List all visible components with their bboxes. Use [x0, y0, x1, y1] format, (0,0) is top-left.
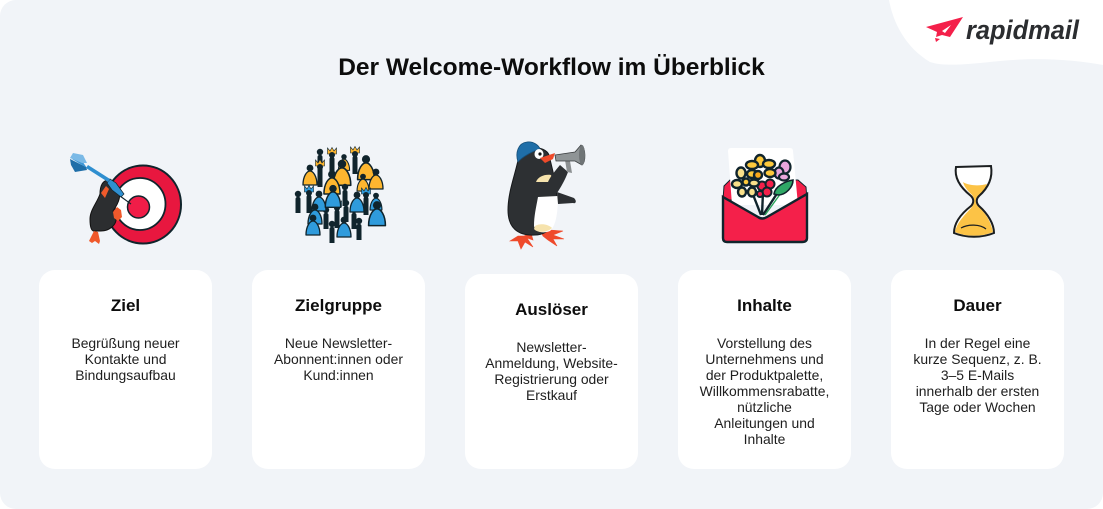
text: Inhalte: der Produktpalette, — [706, 367, 823, 383]
text: Inhalte: Willkommensrabatte, — [700, 383, 829, 399]
icon: audience crowd — [295, 146, 385, 243]
text: Inhalte: Unternehmens und — [705, 351, 824, 367]
text: Auslöser: Erstkauf — [526, 387, 577, 403]
text: Zielgruppe: Abonnent:innen oder — [274, 351, 403, 367]
icon: envelope with flowers — [723, 148, 807, 242]
text: Ziel: Begrüßung neuer — [71, 335, 180, 351]
title: Der Welcome-Workflow im Überblick — [338, 54, 765, 81]
panel: Zielgruppe — [252, 270, 425, 469]
text: Ziel: Bindungsaufbau — [75, 367, 176, 383]
heading: Zielgruppe: Zielgruppe — [295, 296, 382, 315]
text: Zielgruppe: Neue Newsletter- — [285, 335, 392, 351]
text: Dauer: 3–5 E-Mails — [941, 367, 1014, 383]
text: Zielgruppe — [274, 335, 403, 383]
icon: dart in target with penguin — [70, 153, 181, 244]
text: Dauer — [913, 335, 1042, 415]
text: Dauer: kurze Sequenz, z. B. — [913, 351, 1042, 367]
text: Ziel: Kontakte und — [85, 351, 166, 367]
text: Inhalte: nützliche — [737, 399, 792, 415]
text: Dauer: innerhalb der ersten — [916, 383, 1039, 399]
text: Inhalte: Vorstellung des — [717, 335, 812, 351]
text: Dauer: Tage oder Wochen — [919, 399, 1036, 415]
text: Auslöser: Registrierung oder — [494, 371, 609, 387]
heading: Auslöser: Auslöser — [515, 300, 588, 319]
text: Inhalte: Anleitungen und — [714, 415, 815, 431]
heading: Inhalte: Inhalte — [737, 296, 792, 315]
heading: Dauer: Dauer — [953, 296, 1002, 315]
text: Auslöser — [485, 339, 618, 403]
panel: Auslöser — [465, 274, 638, 469]
panel: Inhalte — [678, 270, 851, 469]
panel: Ziel — [39, 270, 212, 469]
text: Inhalte: Inhalte — [744, 431, 785, 447]
heading: Ziel: Ziel — [111, 296, 140, 315]
text: Auslöser: Newsletter- — [516, 339, 587, 355]
icon: penguin with megaphone — [508, 142, 585, 249]
panel: Dauer — [891, 270, 1064, 469]
logo: white corner shape — [889, 0, 1103, 65]
text: Auslöser: Anmeldung, Website- — [485, 355, 618, 371]
text: Inhalte — [700, 335, 829, 447]
icon: hourglass — [954, 166, 994, 237]
text: Dauer: In der Regel eine — [925, 335, 1030, 351]
text: Ziel — [71, 335, 180, 383]
text: Zielgruppe: Kund:innen — [303, 367, 374, 383]
logo: rapidmail: rapidmail — [966, 15, 1079, 45]
